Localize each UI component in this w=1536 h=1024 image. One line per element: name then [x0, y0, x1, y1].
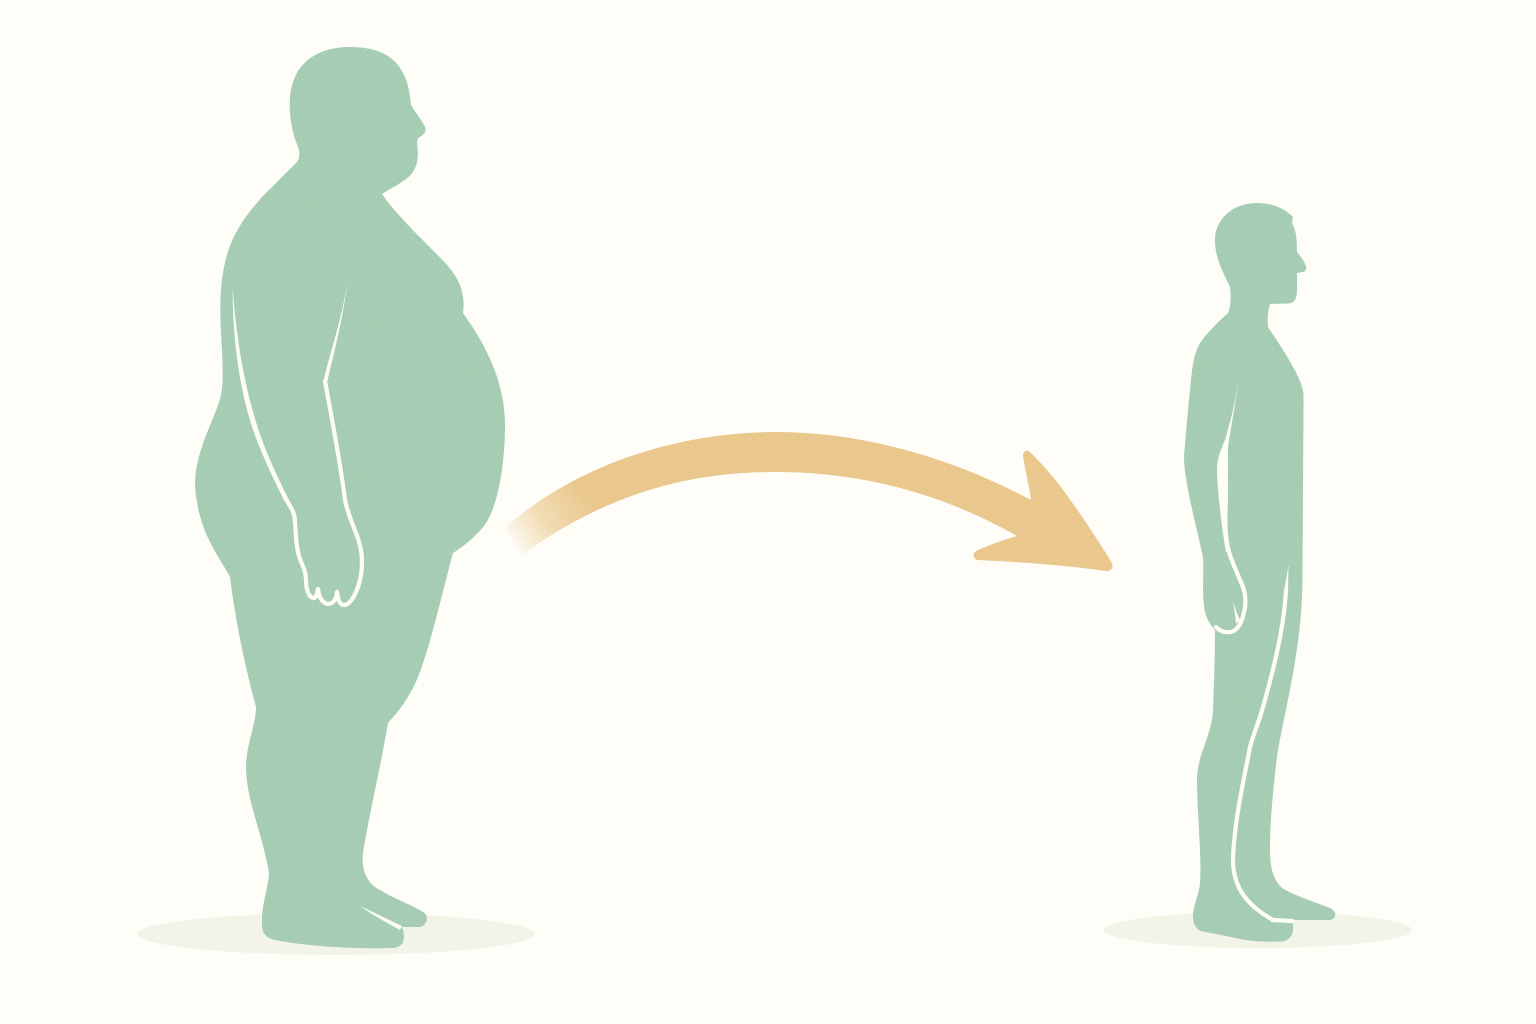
slim figure arm outline: [1216, 372, 1245, 632]
ground shadow: slim figure: [1104, 912, 1412, 948]
large figure silhouette: [195, 47, 505, 948]
ground shadow: large figure: [137, 913, 535, 955]
large figure foot line: [360, 906, 402, 930]
slim figure silhouette: [1184, 203, 1335, 942]
slim figure leg line: [1233, 565, 1292, 921]
large figure arm outline: [232, 277, 362, 605]
arrow: curved transition from large to slim: [506, 432, 1113, 571]
